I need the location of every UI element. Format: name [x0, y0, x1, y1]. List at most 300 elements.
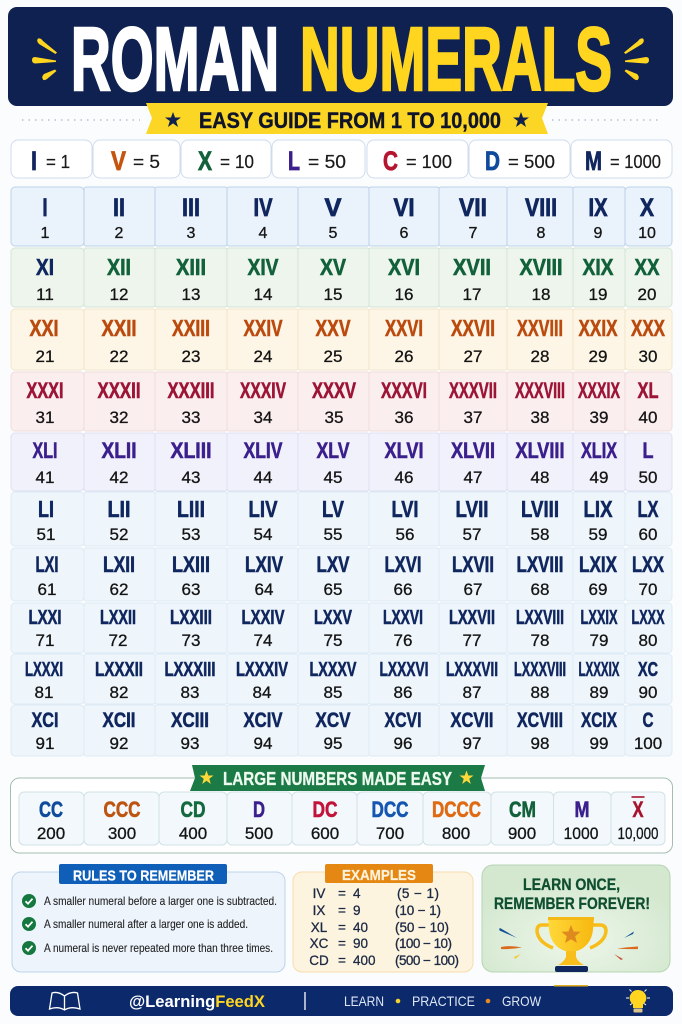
card 600: DC: [312, 797, 338, 822]
cell 75: LXXV: [314, 606, 352, 629]
cell 2: II: [113, 194, 125, 222]
cell 9: 9: [594, 225, 603, 242]
cell 12: [84, 248, 155, 307]
cell 26: [369, 309, 439, 370]
subtitle ribbon: EASY GUIDE FROM 1 TO 10,000: [199, 108, 501, 133]
card 1000: 1000: [564, 824, 598, 843]
cell 79: [573, 603, 625, 653]
cell 64: 64: [255, 580, 273, 599]
cell 50: L: [642, 438, 654, 463]
cell 29: XXIX: [578, 315, 618, 341]
cell 61: LXI: [36, 552, 58, 577]
cell 3: 3: [187, 225, 196, 242]
cell 93: 93: [181, 734, 199, 753]
cell 77: 77: [463, 631, 481, 650]
cell 99: [573, 705, 625, 756]
cell 2: [84, 187, 155, 246]
cell 27: [439, 309, 507, 370]
examples heading tab: [325, 864, 433, 884]
cell 9: [573, 187, 625, 246]
cell 43: 43: [182, 468, 200, 487]
cell 42: 42: [110, 468, 128, 487]
cell 33: [155, 372, 227, 431]
cell 13: 13: [182, 285, 200, 304]
cell 67: LXVII: [452, 552, 494, 577]
cell 22: 22: [110, 347, 128, 366]
cell 6: VI: [394, 194, 414, 222]
cell 70: LXX: [632, 552, 664, 577]
cell 57: LVII: [456, 496, 488, 522]
cell 81: LXXXI: [25, 658, 63, 681]
footer motto: GROW: [502, 993, 542, 1009]
example XL: XL: [311, 920, 328, 935]
cell 69: [573, 548, 625, 601]
cell 78: [507, 603, 573, 653]
cell 49: [573, 433, 625, 491]
cell 63: [155, 548, 227, 601]
cell 40: 40: [639, 408, 657, 427]
cell 94: [227, 705, 298, 756]
row 81-90: [11, 654, 672, 704]
cell 65: LXV: [316, 552, 350, 577]
cell 45: 45: [324, 468, 342, 487]
cell 5: V: [324, 194, 342, 222]
cell 34: [227, 372, 298, 431]
cell 11: [11, 248, 84, 307]
cell 76: [369, 603, 439, 653]
cell 23: XXIII: [172, 315, 210, 341]
cell 65: 65: [324, 580, 342, 599]
key C: [367, 140, 468, 178]
cell 26: XXVI: [385, 315, 423, 341]
cell 59: LIX: [584, 496, 613, 522]
cell 52: LII: [108, 496, 130, 522]
card 200: CC: [39, 797, 63, 822]
icon: green ribbon star left: [200, 770, 214, 784]
row 71-80: [11, 603, 672, 653]
examples heading tab: EXAMPLES: [342, 867, 416, 884]
cell 58: 58: [531, 525, 549, 544]
cell 98: XCVIII: [517, 708, 563, 732]
cell 72: 72: [109, 631, 127, 650]
example XL: 40: [353, 920, 368, 935]
cell 91: 91: [36, 734, 54, 753]
cell 38: 38: [531, 408, 549, 427]
cell 88: LXXXVIII: [514, 658, 566, 681]
cell 39: XXXIX: [578, 378, 620, 403]
cell 69: LXIX: [579, 552, 617, 577]
cell 29: 29: [589, 347, 607, 366]
cell 59: 59: [589, 525, 607, 544]
cell 31: [11, 372, 84, 431]
cell 84: [227, 654, 298, 704]
rules heading tab: RULES TO REMEMBER: [73, 868, 214, 884]
cell 96: 96: [394, 734, 412, 753]
cell 89: LXXXIX: [578, 658, 620, 681]
card 500: [227, 792, 292, 845]
cell 31: 31: [36, 408, 54, 427]
example CD: (500 − 100): [395, 953, 459, 968]
cell 20: [625, 248, 672, 307]
cell 5: 5: [329, 225, 338, 242]
example XL: =: [338, 920, 346, 935]
cell 55: [298, 492, 369, 546]
cell 62: LXII: [103, 552, 135, 577]
title: ROMAN NUMERALS: ROMAN: [71, 10, 279, 110]
cell 32: XXXII: [98, 378, 140, 403]
example CD: =: [338, 953, 346, 968]
cell 15: XV: [320, 254, 347, 280]
example XL: [311, 920, 449, 935]
large numbers ribbon heading: LARGE NUMBERS MADE EASY: [223, 769, 452, 789]
cell 86: 86: [394, 683, 412, 702]
cell 48: [507, 433, 573, 491]
cell 30: 30: [639, 347, 657, 366]
cell 66: [369, 548, 439, 601]
cell 75: 75: [324, 631, 342, 650]
cell 87: LXXXVII: [446, 658, 498, 681]
cell 55: LV: [322, 496, 345, 522]
cell 77: [439, 603, 507, 653]
cell 36: [369, 372, 439, 431]
cell 24: 24: [254, 347, 272, 366]
cell 80: 80: [639, 631, 657, 650]
cell 44: XLIV: [244, 438, 283, 463]
example XC: 90: [353, 936, 368, 951]
cell 73: LXXIII: [170, 606, 212, 629]
cell 72: [84, 603, 155, 653]
cell 40: [625, 372, 672, 431]
cell 1: [11, 187, 84, 246]
icon: ribbon star right: [513, 112, 529, 127]
cell 14: XIV: [248, 254, 279, 280]
key M: [571, 140, 672, 178]
example CD: [309, 953, 459, 968]
cell 48: 48: [531, 468, 549, 487]
cell 81: 81: [35, 683, 53, 702]
footer motto: PRACTICE: [412, 993, 475, 1009]
cell 97: XCVII: [450, 708, 494, 732]
cell 10: 10: [638, 225, 656, 242]
cell 85: 85: [324, 683, 342, 702]
icon: celebration rays: [499, 928, 638, 960]
key V: = 5: [133, 152, 160, 172]
cell 36: 36: [395, 408, 413, 427]
cell 57: [439, 492, 507, 546]
cell 87: 87: [463, 683, 481, 702]
card 900: [491, 792, 554, 845]
cell 83: 83: [181, 683, 199, 702]
cell 79: 79: [590, 631, 608, 650]
cell 47: 47: [464, 468, 482, 487]
row 91-100: [11, 705, 672, 756]
example XC: =: [338, 936, 346, 951]
cell 38: XXXVIII: [515, 378, 565, 403]
cell 92: [84, 705, 155, 756]
cell 15: [298, 248, 369, 307]
cell 81: [11, 654, 84, 704]
card 600: 600: [311, 824, 339, 843]
row 41-50: [11, 433, 672, 491]
cell 12: 12: [110, 285, 128, 304]
cell 3: [155, 187, 227, 246]
cell 19: [573, 248, 625, 307]
cell 25: [298, 309, 369, 370]
callout text: REMEMBER FOREVER!: [494, 894, 650, 913]
example XC: [310, 936, 452, 951]
handle @LearningFeedX: @LearningFeedX: [129, 993, 265, 1011]
cell 92: XCII: [102, 708, 136, 732]
cell 59: [573, 492, 625, 546]
card 800: 800: [442, 824, 470, 843]
cell 11: 11: [36, 285, 54, 304]
subtitle ribbon: [146, 103, 548, 134]
cell 41: [11, 433, 84, 491]
panel: large numbers: [10, 765, 672, 853]
cell 60: 60: [639, 525, 657, 544]
cell 51: [11, 492, 84, 546]
icon: ribbon star left: [165, 112, 181, 127]
card 900: 900: [508, 824, 536, 843]
card 10,000: [611, 792, 665, 845]
cell 68: 68: [531, 580, 549, 599]
cell 35: XXXV: [312, 378, 356, 403]
example IX: (10 − 1): [395, 903, 441, 918]
title: ROMAN NUMERALS: [71, 10, 612, 110]
cell 58: [507, 492, 573, 546]
card 700: [357, 792, 423, 845]
cell 18: 18: [532, 285, 550, 304]
cell 30: XXX: [631, 315, 665, 341]
cell 97: 97: [463, 734, 481, 753]
cell 6: 6: [400, 225, 409, 242]
cell 78: 78: [531, 631, 549, 650]
cell 84: 84: [253, 683, 271, 702]
cell 96: XCVI: [384, 708, 422, 732]
cell 99: 99: [590, 734, 608, 753]
key M: M: [585, 146, 602, 176]
cell 17: [439, 248, 507, 307]
cell 73: [155, 603, 227, 653]
cell 19: XIX: [582, 254, 614, 280]
cell 26: 26: [395, 347, 413, 366]
row 21-30: [11, 309, 672, 370]
card 1000: [554, 792, 611, 845]
cell 82: [84, 654, 155, 704]
cell 20: 20: [638, 285, 656, 304]
cell 60: [625, 492, 672, 546]
cell 8: 8: [537, 225, 546, 242]
cell 39: [573, 372, 625, 431]
number chart 1 to 100: [11, 187, 672, 756]
cell 28: [507, 309, 573, 370]
key L: = 50: [308, 152, 346, 172]
cell 17: 17: [463, 285, 481, 304]
cell 4: 4: [259, 225, 268, 242]
cell 56: [369, 492, 439, 546]
icon: light bulb: [626, 990, 650, 1012]
cell 41: 41: [36, 468, 54, 487]
cell 66: 66: [394, 580, 412, 599]
cell 79: LXXIX: [580, 606, 618, 629]
key M: = 1000: [610, 152, 661, 172]
cell 14: [227, 248, 298, 307]
cell 95: 95: [324, 734, 342, 753]
card 900: CM: [509, 797, 536, 822]
example CD: 400: [353, 953, 376, 968]
cell 90: XC: [638, 658, 658, 681]
cell 63: 63: [182, 580, 200, 599]
cell 32: 32: [110, 408, 128, 427]
cell 44: 44: [254, 468, 272, 487]
key L: L: [288, 146, 300, 176]
key X: [181, 140, 271, 178]
callout text: [494, 875, 650, 913]
example IX: [313, 903, 441, 918]
cell 13: XIII: [176, 254, 206, 280]
cell 5: [298, 187, 369, 246]
example XL: (50 − 10): [395, 920, 449, 935]
rule 2: A smaller numeral after a larger one is added.: [44, 918, 248, 931]
header banner: [8, 7, 673, 110]
cell 68: LXVIII: [516, 552, 564, 577]
cell 22: XXII: [102, 315, 136, 341]
example IV: 4: [353, 886, 361, 901]
cell 93: XCIII: [171, 708, 209, 732]
cell 42: XLII: [102, 438, 136, 463]
cell 87: [439, 654, 507, 704]
cell 45: XLV: [316, 438, 350, 463]
row 31-40: [11, 372, 672, 431]
cell 48: XLVIII: [516, 438, 564, 463]
card 10,000: 10,000: [618, 824, 658, 843]
footer motto: LEARN: [344, 993, 384, 1009]
cell 50: [625, 433, 672, 491]
cell 36: XXXVI: [381, 378, 427, 403]
row 51-60: [11, 492, 672, 546]
cell 28: XXVIII: [517, 315, 563, 341]
cell 25: XXV: [316, 315, 351, 341]
cell 12: XII: [107, 254, 131, 280]
panel: learn once callout: [482, 865, 670, 972]
key I: I: [31, 146, 37, 176]
card 500: 500: [245, 824, 273, 843]
cell 80: [625, 603, 672, 653]
icon: left sparks: [32, 38, 57, 80]
card 600: [292, 792, 357, 845]
cell 99: XCIX: [581, 708, 617, 732]
cell 37: [439, 372, 507, 431]
cell 72: LXXII: [100, 606, 136, 629]
cell 55: 55: [324, 525, 342, 544]
cell 84: LXXXIV: [236, 658, 288, 681]
cell 25: 25: [324, 347, 342, 366]
key L: [272, 140, 365, 178]
cell 75: [298, 603, 369, 653]
cell 27: 27: [464, 347, 482, 366]
cell 63: LXIII: [172, 552, 210, 577]
cell 92: 92: [110, 734, 128, 753]
cell 74: [227, 603, 298, 653]
cell 35: 35: [325, 408, 343, 427]
cell 62: 62: [110, 580, 128, 599]
key D: = 500: [508, 152, 555, 172]
cell 88: 88: [531, 683, 549, 702]
cell 16: 16: [395, 285, 413, 304]
cell 77: LXXVII: [449, 606, 495, 629]
cell 62: [84, 548, 155, 601]
icon: green ribbon star right: [460, 770, 474, 784]
card 400: CD: [180, 797, 206, 822]
cell 34: XXXIV: [240, 378, 286, 403]
cell 20: XX: [634, 254, 660, 280]
cell 10: X: [640, 194, 654, 222]
rule 1: A smaller numeral before a larger one is subtracted.: [44, 895, 277, 908]
cell 14: 14: [254, 285, 272, 304]
cell 1: I: [42, 194, 48, 222]
cell 58: LVIII: [521, 496, 559, 522]
cell 10: [625, 187, 672, 246]
cell 40: XL: [638, 378, 658, 403]
key I: [11, 140, 92, 178]
example IV: =: [338, 886, 346, 901]
card 300: 300: [108, 824, 136, 843]
cell 32: [84, 372, 155, 431]
cell 61: [11, 548, 84, 601]
cell 35: [298, 372, 369, 431]
card 800: DCCC: [432, 797, 481, 822]
cell 83: LXXXIII: [164, 658, 216, 681]
cell 39: 39: [590, 408, 608, 427]
cell 21: 21: [36, 347, 54, 366]
cell 21: XXI: [30, 315, 58, 341]
cell 90: 90: [639, 683, 657, 702]
card 300: [84, 792, 159, 845]
cell 43: [155, 433, 227, 491]
example CD: CD: [309, 953, 329, 968]
cell 37: 37: [464, 408, 482, 427]
cell 18: XVIII: [520, 254, 562, 280]
cell 4: [227, 187, 298, 246]
cell 50: 50: [639, 468, 657, 487]
cell 74: 74: [254, 631, 272, 650]
cell 41: XLI: [32, 438, 58, 463]
cell 96: [369, 705, 439, 756]
row 61-70: [11, 548, 672, 601]
key D: D: [485, 146, 500, 176]
cell 9: IX: [588, 194, 608, 222]
cell 69: 69: [589, 580, 607, 599]
card 200: [19, 792, 84, 845]
cell 1: 1: [41, 225, 50, 242]
cell 42: [84, 433, 155, 491]
cell 15: 15: [324, 285, 342, 304]
large numbers ribbon heading: [190, 765, 485, 791]
cell 53: 53: [182, 525, 200, 544]
cell 53: [155, 492, 227, 546]
cell 98: 98: [531, 734, 549, 753]
cell 67: [439, 548, 507, 601]
cell 94: 94: [254, 734, 272, 753]
cell 98: [507, 705, 573, 756]
cell 71: 71: [36, 631, 54, 650]
cell 76: 76: [394, 631, 412, 650]
cell 51: 51: [37, 525, 55, 544]
cell 6: [369, 187, 439, 246]
cell 11: XI: [36, 254, 54, 280]
cell 56: LVI: [392, 496, 418, 522]
cell 47: [439, 433, 507, 491]
